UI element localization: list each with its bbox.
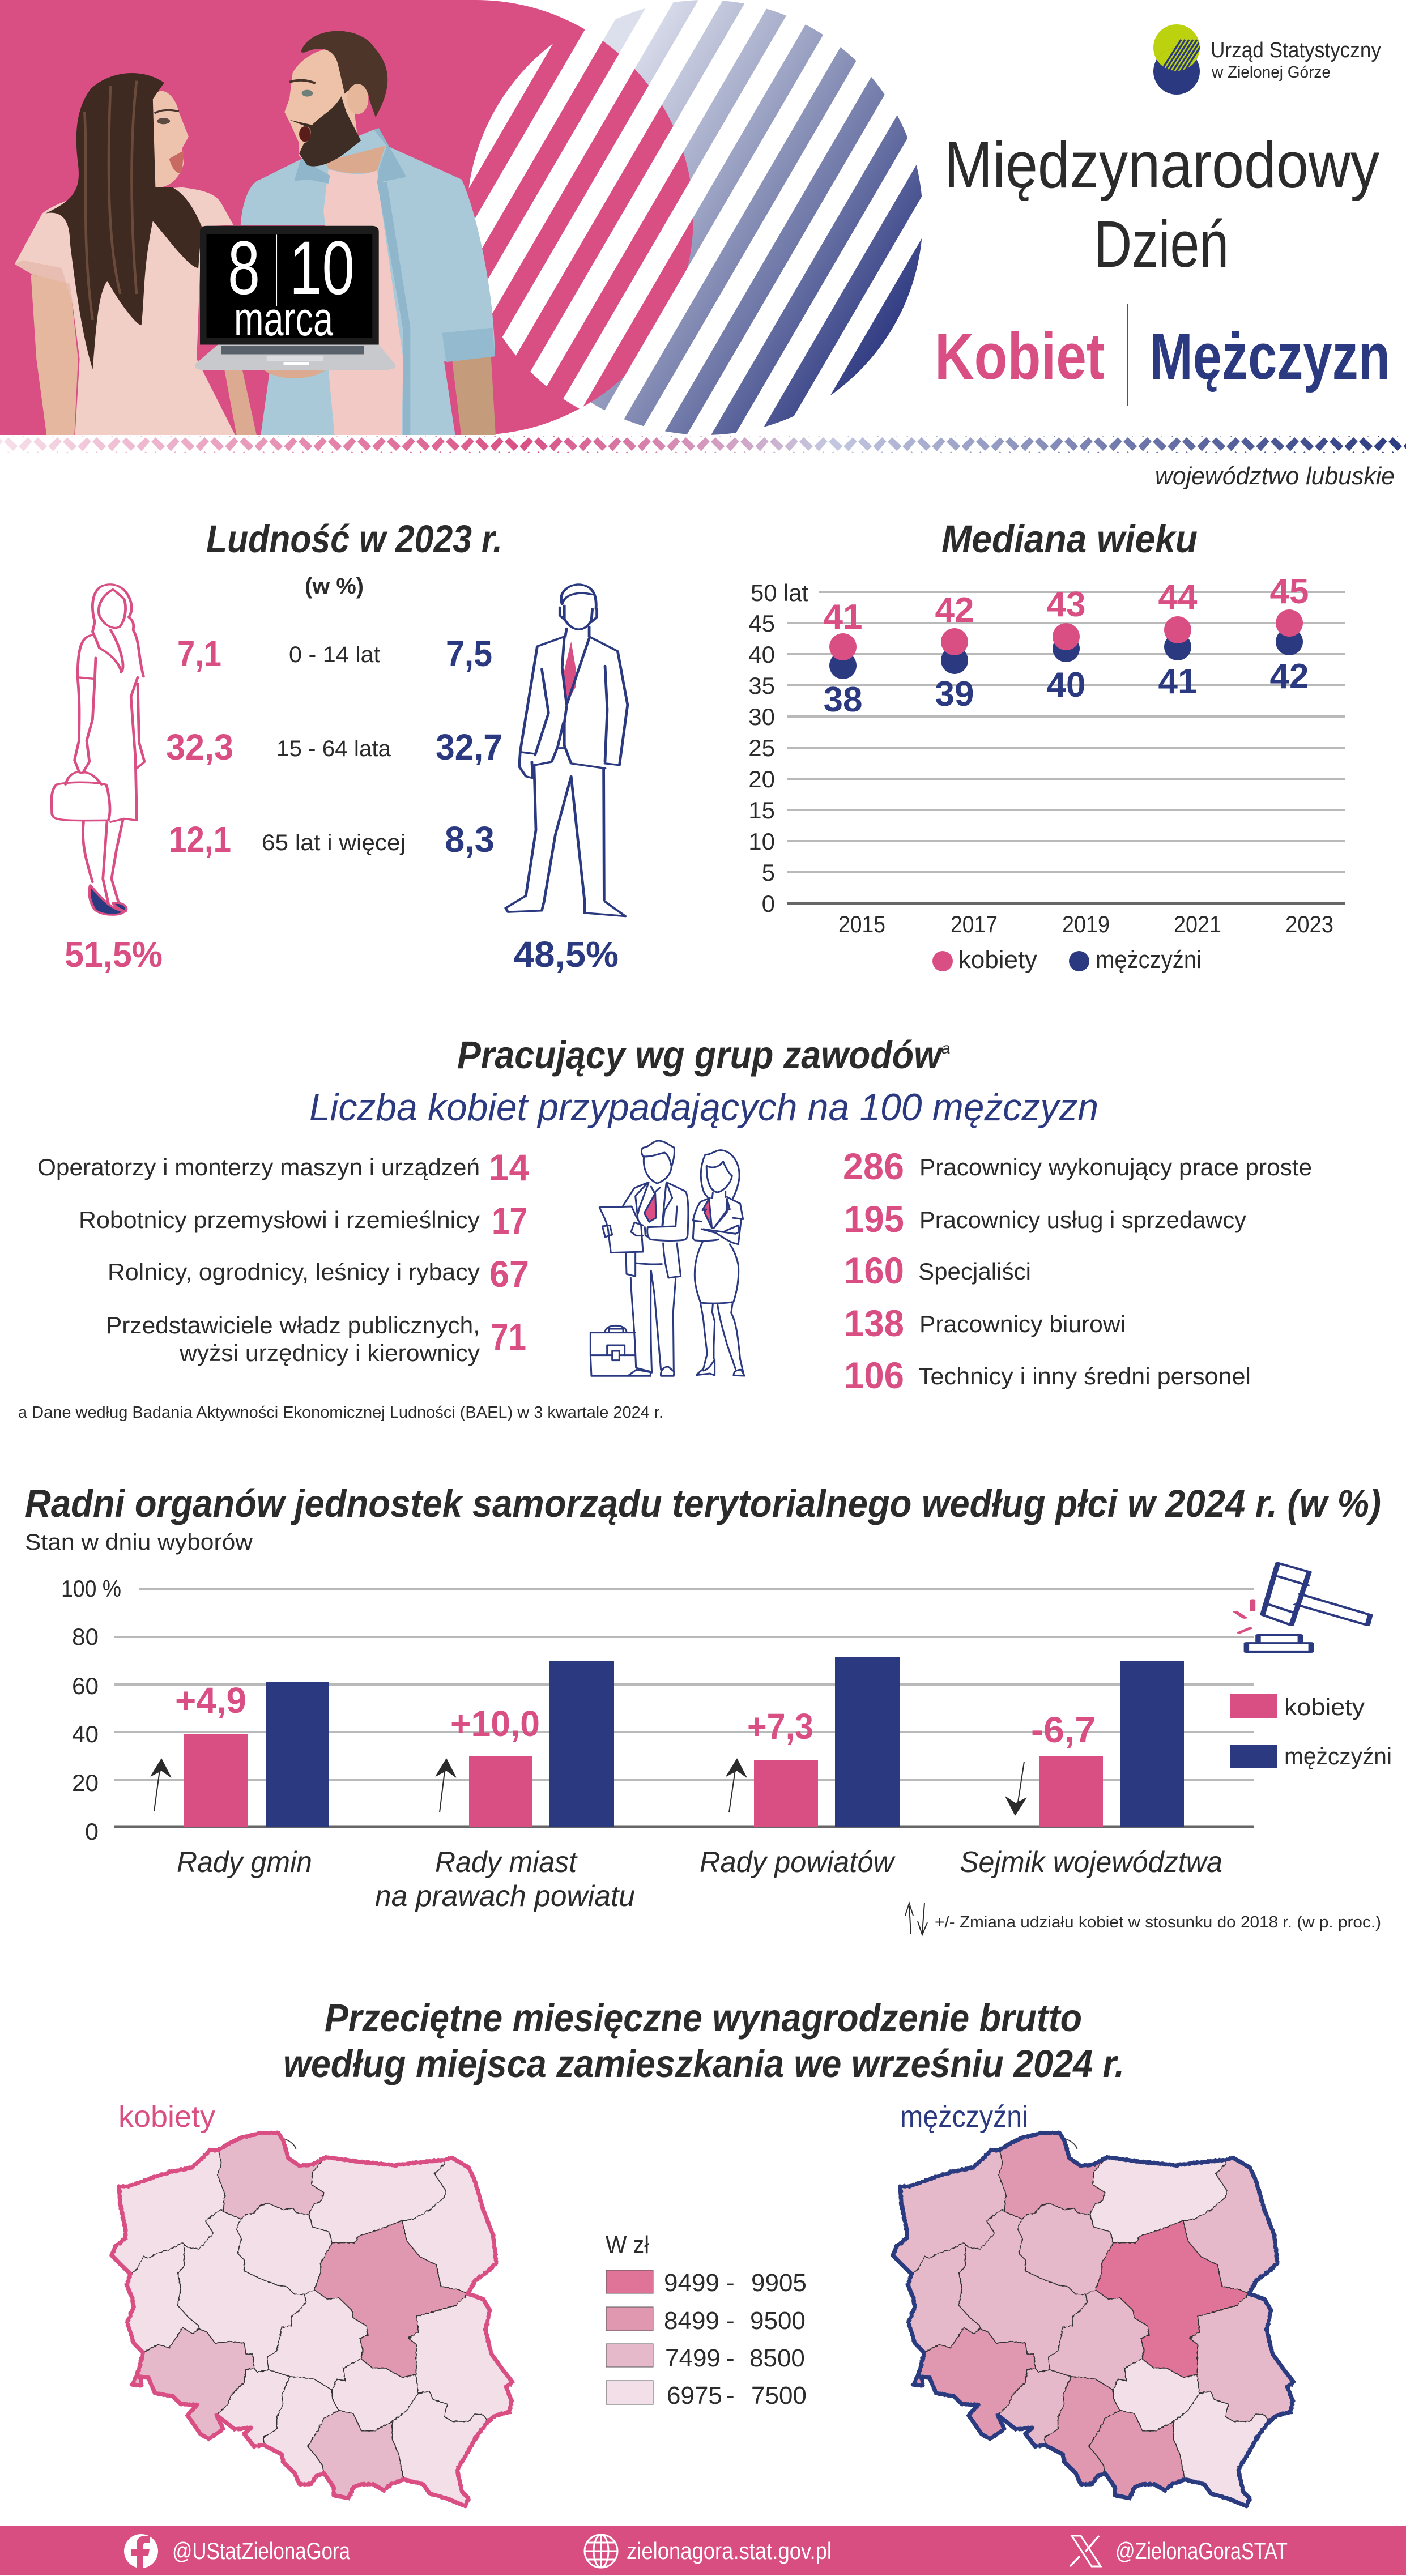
panel: councillors [25,1482,1392,1935]
y axis labels: 25 [748,735,775,761]
map legend: - [726,2307,735,2335]
y axis labels: 35 [748,672,775,699]
date on laptop screen: 10 [289,226,355,310]
men values: 41 [1158,662,1197,701]
icon: woman [52,585,144,915]
change values: +7,3 [747,1706,813,1747]
totals: 48,5% [514,934,619,975]
main title [935,128,1390,406]
panel: population [52,517,628,975]
legend: kobiety [958,946,1037,974]
y axis labels [61,1575,121,1845]
map legend: 9500 [750,2307,806,2335]
arrows [151,1759,1026,1815]
x axis labels: 2017 [951,911,998,937]
category labels: Rady powiatów [700,1846,896,1879]
footnote: a Dane według Badania Aktywności Ekonomicznej Ludności (BAEL) w 3 kwartale 2024 r. [18,1404,663,1422]
map: men [893,2133,1294,2506]
category labels: Rady miast [435,1846,578,1879]
age rows: 7,5 [446,633,492,674]
age rows: 32,7 [436,727,502,767]
age rows: 0 - 14 lat [289,642,380,667]
heading: median age: Mediana wieku [941,517,1198,561]
heading: wages: według miejsca zamieszkania we wrześniu 2024 r. [283,2042,1124,2085]
blue striped circle [590,0,922,435]
panel: occupational groups [18,1033,1312,1422]
dot chart [748,572,1345,937]
subheading: Liczba kobiet przypadających na 100 mężczyzn [309,1086,1098,1129]
right list: 286 [843,1145,904,1187]
age rows: 12,1 [169,819,231,860]
y axis labels [748,579,808,917]
map legend: 7500 [751,2382,807,2409]
heading: wages: Przeciętne miesięczne wynagrodzenie brutto [325,1996,1082,2040]
heading: occupations: a [941,1039,951,1057]
website: zielonagora.stat.gov.pl [627,2537,832,2564]
map legend: 9905 [751,2269,807,2297]
date on laptop screen [228,226,355,346]
heading: wages [283,1996,1124,2085]
map legend: 9499 [664,2269,719,2297]
icon: facebook [124,2534,158,2568]
legend [932,946,1202,974]
note: as of election day: Stan w dniu wyborów [25,1530,253,1555]
main title: Dzień [1094,207,1229,281]
x axis labels: 2021 [1174,911,1221,937]
y axis labels: 100 % [61,1575,121,1602]
map legend: 6975 [667,2382,722,2409]
right list: Pracownicy usług i sprzedawcy [919,1206,1246,1233]
icon: X [1070,2536,1101,2566]
women values: 41 [824,598,862,637]
icon: gavel [1235,1563,1370,1652]
label: women map: kobiety [118,2100,215,2134]
totals: 51,5% [65,934,163,975]
map legend: 7499 [665,2344,721,2372]
man [241,31,496,440]
bar chart [61,1575,1254,1913]
note on arrows [905,1903,1381,1935]
panel: wages [112,1996,1294,2506]
footer bar [0,2526,1406,2575]
men bars [266,1657,1184,1827]
men series [829,628,1303,679]
y axis labels: 40 [72,1721,99,1747]
age rows: 65 lat i więcej [262,830,406,855]
y axis labels: 45 [748,610,775,637]
left list: 14 [489,1146,529,1188]
map legend: 8500 [749,2344,805,2372]
map legend [606,2231,807,2409]
legend [1230,1694,1392,1769]
left list: Operatorzy i monterzy maszyn i urządzeń [37,1154,480,1180]
right list: Pracownicy biurowi [919,1311,1126,1337]
photo: woman and man holding a laptop [15,31,496,440]
men values: 40 [1047,666,1085,705]
map legend: 8499 [664,2307,719,2335]
y axis labels: 0 [762,890,775,917]
y axis labels: 15 [748,797,775,824]
map legend: - [726,2344,735,2372]
y axis labels: 50 lat [751,579,808,606]
change values: +10,0 [450,1703,540,1744]
category labels [177,1846,1222,1913]
decorative ribbon [0,436,1406,453]
handle: facebook: @UStatZielonaGora [172,2537,351,2564]
change values [175,1680,1096,1750]
x axis labels: 2015 [838,911,885,937]
white stripes on pink circle [468,1,834,419]
logo: Urząd Statystyczny w Zielonej Górze [1153,24,1381,95]
logo: Urząd Statystyczny w Zielonej Górze: Urząd Statystyczny [1211,39,1381,62]
date on laptop screen: 8 [228,226,260,310]
main title: Kobiet [935,319,1105,393]
icon: man and woman with briefcase [590,1141,744,1376]
date on laptop screen: marca [234,292,333,346]
right list: Technicy i inny średni personel [918,1363,1251,1389]
category labels: Rady gmin [177,1846,312,1879]
note on arrows: +/- Zmiana udziału kobiet w stosunku do 2018 r. (w p. proc.) [935,1913,1381,1931]
map: women [112,2133,513,2506]
y axis labels: 10 [748,828,775,855]
y axis labels: 5 [762,859,775,886]
right list: 160 [844,1249,904,1291]
header banner [0,0,922,435]
laptop [195,226,395,378]
region label: województwo lubuskie [1155,462,1395,490]
age rows [166,633,502,860]
y axis labels: 0 [85,1818,99,1845]
legend: kobiety [1284,1694,1365,1720]
y axis labels: 80 [72,1623,99,1650]
y axis labels: 20 [72,1769,99,1796]
women values [824,572,1309,637]
age rows: 15 - 64 lata [276,736,391,761]
age rows: 8,3 [445,819,495,860]
unit: (w %) [305,574,364,599]
icon: globe [585,2535,617,2568]
panel: median age [748,517,1345,974]
map legend: - [726,2382,735,2409]
map legend: W zł [606,2231,649,2259]
change values: +4,9 [175,1680,246,1721]
right list: 138 [844,1302,904,1344]
left list: Robotnicy przemysłowi i rzemieślnicy [79,1206,480,1233]
women values: 45 [1270,572,1309,611]
pink panel [0,0,693,435]
men values [824,657,1309,719]
category labels: na prawach powiatu [375,1880,635,1913]
handle: X: @ZielonaGoraSTAT [1115,2537,1288,2564]
right list: 195 [844,1198,904,1240]
right list: 106 [844,1354,904,1396]
legend: mężczyźni [1284,1743,1392,1769]
woman [15,73,258,440]
heading: population: Ludność w 2023 r. [206,517,502,561]
women bars [184,1734,1103,1827]
men values: 42 [1270,657,1309,696]
legend: mężczyźni [1096,946,1202,974]
women values: 42 [935,591,974,630]
icon: man [506,585,628,916]
map legend: - [726,2269,735,2297]
left list: Rolnicy, ogrodnicy, leśnicy i rybacy [108,1259,480,1285]
change values: -6,7 [1031,1709,1096,1750]
age rows: 32,3 [166,727,233,767]
y axis labels: 20 [748,766,775,792]
right list: Pracownicy wykonujący prace proste [919,1154,1312,1180]
men values: 38 [824,680,862,719]
women values: 44 [1158,578,1198,617]
left list: 67 [489,1253,529,1295]
age rows: 7,1 [177,633,221,674]
heading: occupations: Pracujący wg grup zawodów [457,1033,944,1077]
y axis labels: 40 [748,641,775,668]
x axis labels: 2023 [1285,911,1333,937]
y axis labels: 30 [748,703,775,730]
left list: Przedstawiciele władz publicznych, [106,1312,480,1338]
y axis labels: 60 [72,1673,99,1699]
left list [37,1146,529,1366]
right list [843,1145,1312,1396]
logo hatched overlap [1153,40,1205,95]
label: men map: mężczyźni [900,2100,1028,2134]
logo: Urząd Statystyczny w Zielonej Górze: w Zielonej Górze [1211,63,1331,82]
x axis labels: 2019 [1062,911,1110,937]
category labels: Sejmik województwa [960,1846,1222,1879]
right list: Specjaliści [918,1258,1031,1285]
left list: 71 [491,1316,526,1358]
women values: 43 [1047,585,1085,624]
left list: 17 [492,1200,527,1242]
x axis labels [838,911,1333,937]
totals [65,934,619,975]
left list: wyżsi urzędnicy i kierownicy [179,1340,480,1366]
women series [829,609,1303,660]
men values: 39 [935,675,974,714]
